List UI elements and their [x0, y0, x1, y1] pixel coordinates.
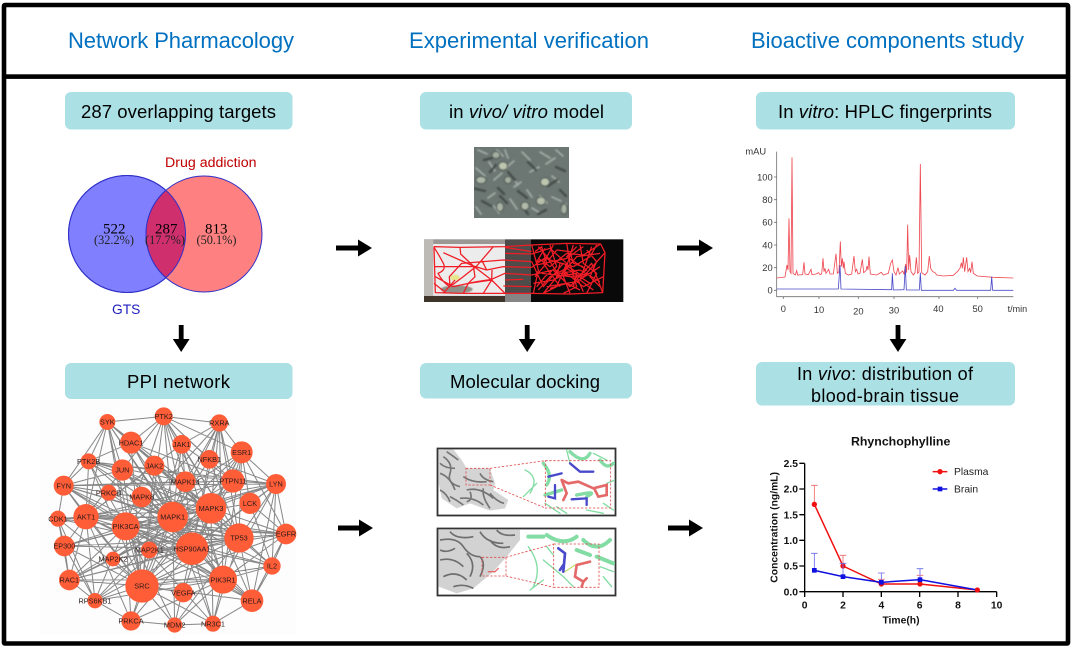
HPLC red trace — [777, 157, 1013, 278]
network node labels: FYN — [56, 481, 71, 490]
chart legend: Brain — [954, 484, 978, 495]
arrow: network to experiment lower — [338, 520, 373, 536]
network node labels: NFKB1 — [198, 455, 221, 464]
network node labels: JUN — [115, 466, 129, 475]
network node labels: PIK3CA — [113, 522, 139, 531]
network node labels: TP53 — [230, 534, 248, 543]
HPLC labels: 50 — [972, 304, 983, 314]
network node labels: JAK1 — [173, 440, 190, 449]
HPLC labels: 60 — [762, 218, 773, 228]
axis labels: 8 — [955, 600, 961, 611]
plasma series — [811, 485, 980, 593]
HPLC labels: 10 — [814, 305, 824, 315]
network node labels: PRKCA — [118, 617, 144, 626]
network node labels: MDM2 — [164, 621, 185, 630]
network node labels: MAP2K1 — [135, 546, 164, 555]
HPLC labels: 80 — [762, 195, 773, 205]
axis labels: 2 — [840, 600, 846, 611]
network node labels: MAPK3 — [199, 504, 223, 513]
network node labels: HSP90AA1 — [173, 544, 211, 553]
heading: Bioactive components study: Bioactive components study — [751, 28, 1024, 53]
axis labels: Time(h) — [882, 616, 920, 627]
heading: Experimental verification: Experimental verification — [409, 28, 649, 53]
chart axes — [799, 463, 997, 597]
network node labels: MAPK8 — [129, 493, 154, 502]
pill: In vivo distribution of blood-brain tissue: blood-brain tissue — [811, 386, 959, 406]
brain series — [811, 553, 980, 592]
chart title: Rhynchophylline — [851, 434, 950, 448]
HPLC labels: mAU — [745, 147, 766, 157]
network node labels: PTPN11 — [219, 477, 247, 486]
network node labels: MAPK14 — [171, 477, 200, 486]
HPLC labels: 40 — [933, 304, 944, 314]
heading: Network Pharmacology: Network Pharmacology — [68, 28, 294, 53]
chart legend — [933, 467, 989, 495]
venn diagram: GTS — [112, 302, 140, 317]
chart legend: Plasma — [954, 467, 989, 478]
axis labels: 10 — [991, 600, 1003, 611]
axis labels: 0.5 — [784, 562, 798, 573]
network node labels: LCK — [243, 499, 257, 508]
network node labels: PRKCD — [96, 488, 121, 497]
pill: Molecular docking: Molecular docking — [450, 371, 600, 392]
network edges — [58, 416, 286, 625]
network node labels: IL2 — [267, 562, 277, 571]
pill: PPI network — [65, 363, 292, 399]
HPLC blue trace — [777, 265, 1013, 290]
axis labels: Concentration (ng/mL) — [770, 472, 781, 583]
network node labels: RXRA — [209, 419, 230, 428]
pill: In vivo distribution of blood-brain tissue — [756, 362, 1015, 406]
network node labels: RPS6KB1 — [78, 596, 111, 605]
arrow: experiment to bioactive upper — [677, 240, 713, 256]
ligand and residues — [548, 463, 607, 505]
network node labels: AKT1 — [77, 512, 95, 521]
network node labels: SRC — [134, 582, 150, 591]
pill: in vivo/ vitro model — [420, 92, 632, 130]
HPLC axes — [774, 152, 1013, 299]
pill: in vivo/ vitro model: in vivo/ vitro model — [449, 101, 604, 122]
network node labels: RAC1 — [60, 576, 79, 585]
ligand and residues — [488, 548, 590, 587]
HPLC labels: 0 — [767, 286, 773, 296]
pill: In vivo distribution of blood-brain tissue: In vivo: distribution of — [797, 364, 974, 384]
pharmacokinetic line chart: Rhynchophylline — [770, 434, 1003, 627]
pill: In vitro HPLC fingerprints — [756, 92, 1015, 130]
HPLC labels: 30 — [889, 306, 899, 316]
HPLC labels: 20 — [762, 263, 773, 273]
network node labels: MAPK1 — [160, 513, 185, 522]
HPLC labels: t/min — [1008, 304, 1027, 314]
pill: 287 overlapping targets: 287 overlapping targets — [81, 101, 276, 122]
network node labels: PIK3R1 — [210, 575, 236, 584]
pill: PPI network: PPI network — [127, 371, 231, 392]
zoom callout dashes — [466, 461, 611, 508]
pill: Molecular docking — [420, 363, 632, 398]
protein surface — [439, 449, 508, 511]
network node labels: CDK1 — [48, 514, 68, 523]
venn diagram: 287 — [155, 222, 178, 238]
network node labels: NR3C1 — [201, 619, 225, 628]
venn diagram: Drug addiction — [165, 155, 256, 171]
venn diagram: (32.2%) — [94, 233, 134, 247]
HPLC labels: 100 — [757, 172, 773, 182]
axis labels: 6 — [917, 600, 923, 611]
network node labels: EGFR — [276, 530, 296, 539]
axis labels: 1.5 — [784, 510, 798, 521]
docking panel 2 — [438, 528, 616, 596]
venn diagram: 522 — [103, 222, 126, 238]
arrow: HPLC down to distribution — [890, 325, 906, 352]
HPLC labels: 20 — [853, 306, 864, 316]
zoom callout dashes — [482, 544, 599, 587]
axis labels: 2.0 — [784, 485, 798, 496]
pill: In vitro HPLC fingerprints: In vitro: HPLC fingerprints — [778, 101, 992, 122]
venn diagram: 813 — [205, 222, 228, 238]
network node labels: VEGFA — [171, 588, 196, 597]
network node labels: PTK2B — [77, 457, 100, 466]
network node labels — [48, 412, 296, 630]
network node labels: SYK — [100, 418, 115, 427]
network node labels: PTK2 — [155, 412, 173, 421]
arrow: venn down to PPI — [173, 325, 190, 352]
green protein ribbons — [523, 450, 615, 513]
protein surface — [439, 529, 520, 593]
axis labels: 4 — [878, 600, 884, 611]
photo: cell culture micrograph — [472, 147, 569, 218]
HPLC labels — [745, 147, 1027, 316]
HPLC labels: 0 — [781, 304, 786, 314]
arrow: experiment to bioactive lower — [668, 520, 703, 536]
pill: 287 overlapping targets — [65, 92, 292, 130]
network node labels: ESR1 — [232, 448, 251, 457]
HPLC fingerprint chart — [745, 147, 1027, 316]
network nodes — [50, 407, 296, 633]
green protein ribbons — [528, 535, 613, 590]
venn diagram: (50.1%) — [196, 233, 236, 247]
HPLC labels: 40 — [762, 240, 773, 250]
arrow: in vivo model down to docking — [519, 325, 536, 352]
PPI network — [40, 400, 297, 635]
arrow: network to experiment upper — [336, 240, 372, 256]
network node labels: MAP2K2 — [99, 555, 127, 564]
axis labels: 2.5 — [784, 459, 798, 470]
network node labels: JAK2 — [146, 461, 163, 470]
axis labels: 1.0 — [784, 536, 798, 547]
axis labels: 0 — [802, 600, 808, 611]
photo: open field movement traces — [424, 239, 623, 302]
venn diagram — [68, 155, 262, 317]
axis labels — [770, 459, 1003, 627]
docking panel 1 — [438, 448, 616, 516]
network node labels: RELA — [242, 596, 262, 605]
network node labels: HDAC1 — [119, 438, 143, 447]
venn diagram: (17.7%) — [145, 233, 185, 247]
network node labels: LYN — [269, 480, 283, 489]
axis labels: 0.0 — [784, 587, 798, 598]
network node labels: EP300 — [53, 542, 75, 551]
